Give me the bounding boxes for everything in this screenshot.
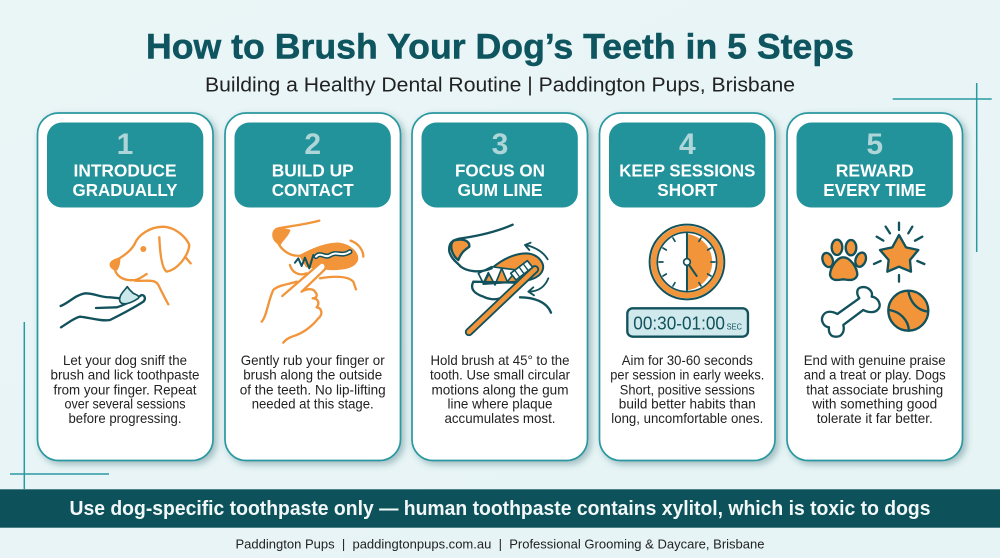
footer: Paddington Pups | paddingtonpups.com.au | Professional Grooming & Daycare, Brisbane — [236, 536, 764, 551]
step 4 text: Aim for 30-60 seconds — [622, 353, 753, 368]
step 3 text: line where plaque — [448, 397, 553, 412]
icon: clock and timer — [627, 225, 748, 337]
warning banner: Use dog-specific toothpaste only — human toothpaste contains xylitol, which is toxic to dogs — [70, 498, 930, 520]
step 4 header: KEEP SESSIONS — [619, 161, 755, 181]
step 1 header: GRADUALLY — [72, 180, 178, 200]
digital timer: SEC — [727, 322, 742, 331]
step 4 header: SHORT — [657, 180, 718, 200]
step 4 text — [610, 353, 764, 426]
step 5 text: with something good — [811, 397, 937, 412]
step 1 header: 1 — [117, 128, 133, 161]
panel: step 2 — [225, 113, 400, 460]
step 5 header: EVERY TIME — [823, 180, 926, 200]
step 5 header — [796, 122, 953, 208]
icon: bone — [822, 287, 880, 337]
panel: step 3 — [412, 113, 588, 460]
icon: toothbrush at gum line — [449, 225, 551, 332]
panel: step 4 — [600, 113, 775, 460]
step 4 header: 4 — [679, 128, 696, 161]
icons: rewards — [820, 223, 928, 337]
step 2 header: CONTACT — [272, 180, 354, 200]
icon: finger rubbing teeth — [262, 221, 363, 343]
step 4 text: long, uncomfortable ones. — [611, 411, 763, 426]
icon: ball — [888, 291, 928, 331]
icon: paw — [820, 240, 868, 280]
step 4 text: Short, positive sessions — [620, 382, 755, 397]
step 1 text: brush and lick toothpaste — [50, 368, 200, 383]
subtitle: Building a Healthy Dental Routine | Paddington Pups, Brisbane — [205, 74, 795, 97]
step 1 text — [50, 353, 200, 426]
step 3 text: accumulates most. — [444, 411, 556, 426]
panel: step 1 — [38, 113, 213, 460]
step 5 text — [804, 353, 946, 426]
step 3 header — [422, 122, 578, 208]
step 5 header: REWARD — [836, 161, 914, 181]
icon: dog sniffing toothpaste on hand — [61, 227, 191, 327]
step 5 text: End with genuine praise — [804, 353, 946, 368]
step 2 header: 2 — [304, 128, 321, 161]
step 3 text — [430, 353, 570, 426]
step 4 header — [609, 122, 765, 208]
step 2 text: needed at this stage. — [252, 397, 374, 412]
step 1 header: INTRODUCE — [74, 161, 176, 181]
step 5 text: and a treat or play. Dogs — [804, 368, 946, 383]
step 1 text: from your finger. Repeat — [54, 382, 197, 397]
digital timer: 00:30-01:00 — [633, 312, 725, 333]
step 3 header: 3 — [492, 128, 508, 161]
step 2 text: brush along the outside — [243, 368, 383, 383]
step 3 text: motions along the gum — [432, 382, 568, 397]
step 4 text: build better habits than — [619, 397, 756, 412]
step 2 text: Gently rub your finger or — [241, 353, 385, 368]
step 3 text: Hold brush at 45° to the — [430, 353, 570, 368]
step 4 text: per session in early weeks. — [610, 368, 764, 383]
warning banner — [0, 489, 1000, 528]
step 5 text: that associate brushing — [806, 382, 943, 397]
step 2 header: BUILD UP — [272, 161, 354, 181]
step 5 header: 5 — [866, 128, 883, 161]
title: How to Brush Your Dog’s Teeth in 5 Steps — [146, 26, 854, 66]
panel: step 5 — [787, 113, 962, 460]
step 3 header: FOCUS ON — [455, 161, 545, 181]
step 1 text: Let your dog sniff the — [63, 353, 187, 368]
step 2 text — [240, 353, 386, 412]
digital timer — [627, 308, 748, 337]
step 5 text: tolerate it far better. — [817, 411, 933, 426]
step 1 text: over several sessions — [64, 397, 186, 412]
step 3 text: tooth. Use small circular — [430, 368, 570, 383]
step 2 text: of the teeth. No lip-lifting — [240, 382, 386, 397]
clock — [650, 225, 724, 299]
step 1 header — [47, 122, 203, 208]
step 3 header: GUM LINE — [458, 180, 542, 200]
icon: star — [874, 223, 924, 282]
step 2 header — [234, 122, 391, 208]
step 1 text: before progressing. — [68, 411, 182, 426]
